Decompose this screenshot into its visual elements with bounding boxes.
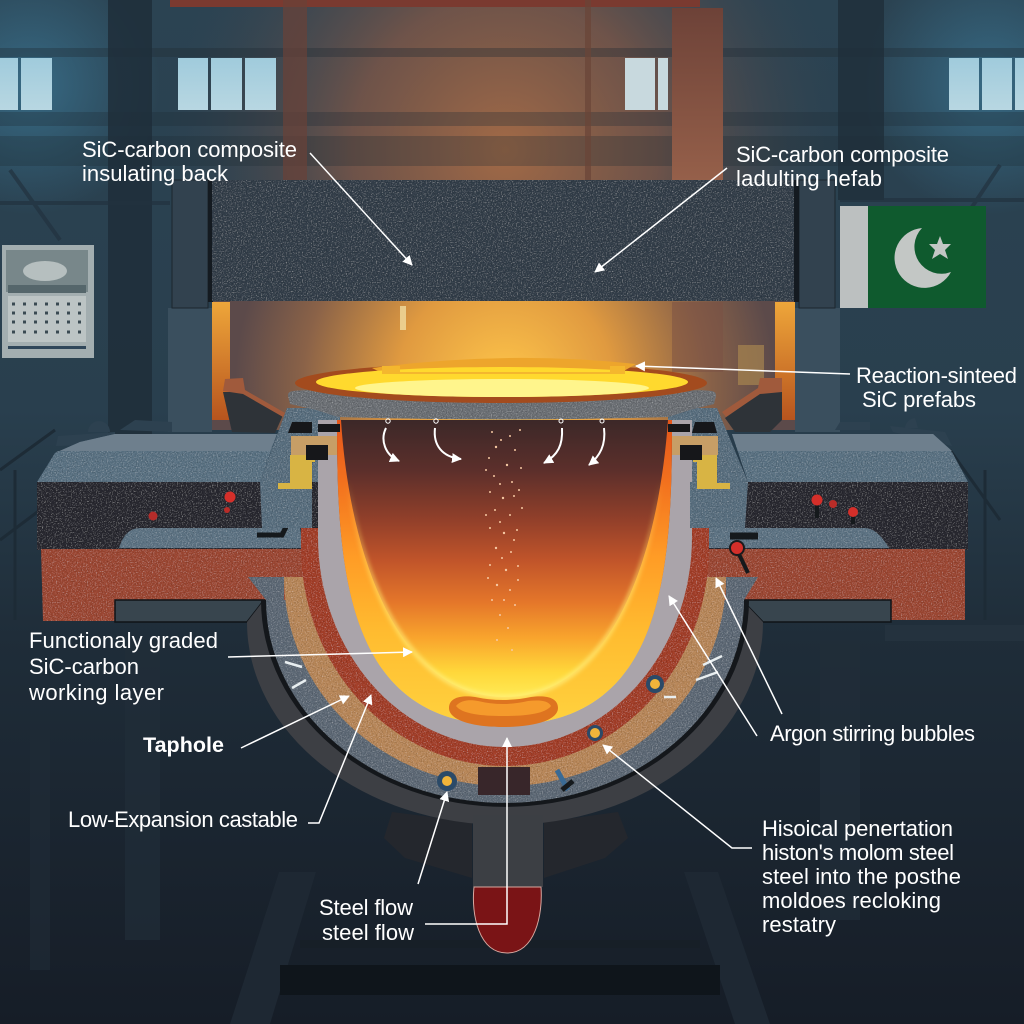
label: historical penetration: moldoes recloking [762, 888, 941, 913]
red backup layer [301, 528, 709, 766]
label: top right prefab: SiC-carbon composite [736, 142, 949, 167]
grey cap layer [732, 434, 968, 482]
label: insulating back: insulating back [82, 161, 229, 186]
label: reaction-sintered prefabs: Reaction-sinteed [856, 363, 1017, 388]
stirring arrows [384, 419, 604, 465]
nozzle stem [473, 815, 543, 887]
back wall [372, 358, 636, 372]
black seam [261, 600, 749, 807]
press block: composite insulating back [212, 180, 794, 301]
taphole support bracket [384, 812, 628, 878]
central pillar [672, 8, 723, 182]
glowing molten rim [337, 420, 672, 725]
grey mid layer [705, 528, 889, 548]
steel flow stream [473, 887, 541, 953]
side columns [168, 180, 840, 432]
background details behind glow [400, 302, 764, 385]
label: working layer: working layer [28, 680, 164, 705]
inclusion markers in lining [285, 656, 722, 791]
dark insulating layer [690, 482, 968, 550]
label: steel flow: steel flow [322, 920, 414, 945]
cap fittings [835, 418, 952, 446]
label: historical penetration: restatry [762, 912, 836, 937]
label: top right prefab: ladulting hefab [736, 166, 882, 191]
label: steel flow: Steel flow [319, 895, 413, 920]
outer grey permanent lining [248, 577, 758, 803]
ladle lining layers [248, 420, 758, 807]
ladle rim [288, 358, 716, 420]
molten surface [316, 367, 688, 397]
crescent [895, 228, 951, 288]
grey mid layer [119, 528, 303, 548]
label: working layer: Functionaly graded [29, 628, 218, 653]
left support arm [223, 378, 285, 433]
right support arm [722, 378, 782, 432]
label: taphole: Taphole [143, 733, 224, 757]
red brick layer [700, 549, 965, 620]
outer rim [295, 363, 707, 403]
red markers [716, 494, 858, 573]
right shoulder lining [668, 408, 748, 528]
dark insulating layer [37, 482, 320, 550]
label: reaction-sintered prefabs: SiC prefabs [862, 387, 976, 412]
tan castable layer [284, 577, 726, 786]
label: historical penetration: Hisoical penertation [762, 816, 953, 841]
red markers [148, 492, 294, 535]
leader arrows [228, 153, 850, 924]
glow under press block [212, 300, 795, 430]
label: historical penetration: steel into the posthe [762, 864, 961, 889]
red brick layer [41, 549, 306, 621]
left shoulder lining [260, 408, 340, 528]
wall calendar [2, 245, 94, 358]
bright inner rim line [341, 420, 668, 697]
bright centre [355, 379, 649, 397]
molten steel [337, 420, 672, 725]
pale SiC-carbon working layer [318, 420, 692, 747]
steel impact pad [449, 696, 558, 727]
windows [0, 58, 1024, 110]
star [929, 236, 951, 259]
argon bubbles [485, 429, 523, 651]
right shell block [690, 418, 968, 620]
stone ring [288, 390, 716, 420]
label: insulating back: SiC-carbon composite [82, 137, 297, 162]
label: working layer: SiC-carbon [29, 654, 139, 679]
label: historical penetration: histon's molom steel [762, 840, 954, 865]
lower housing and flange plates [115, 600, 891, 825]
grey cap layer [37, 434, 277, 482]
flag of Pakistan [840, 206, 986, 308]
left shell block [37, 420, 320, 621]
label: low expansion castable: Low-Expansion castable [68, 807, 298, 832]
label: argon bubbles: Argon stirring bubbles [770, 721, 975, 746]
taphole block [478, 767, 530, 795]
cap fittings [56, 420, 172, 446]
